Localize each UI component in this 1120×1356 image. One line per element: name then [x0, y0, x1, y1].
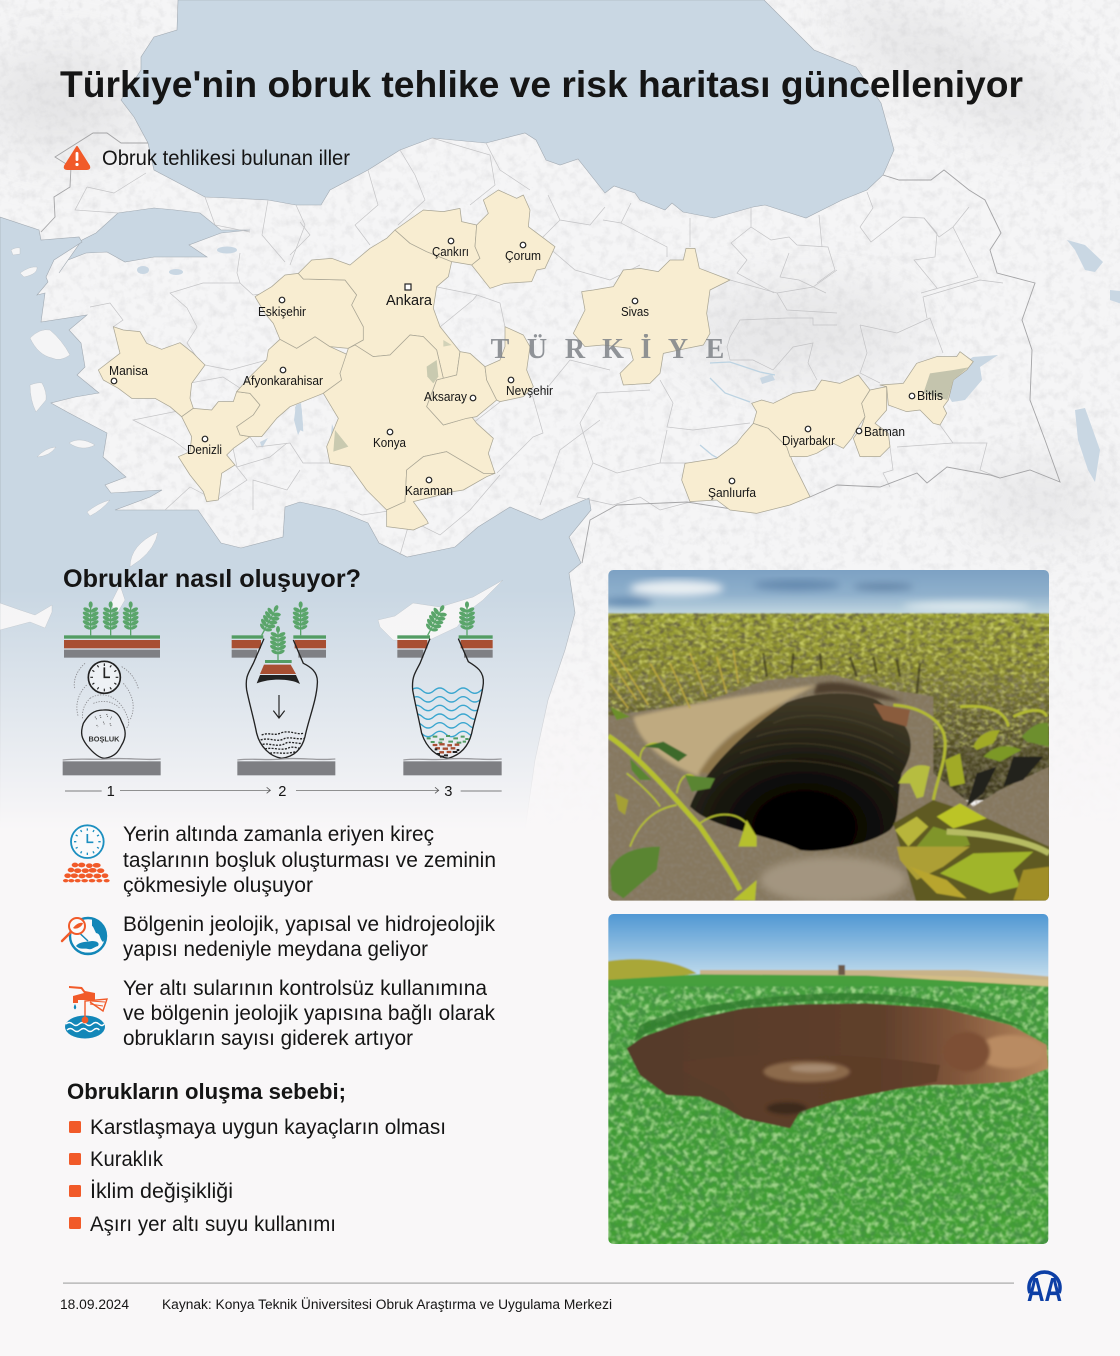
heading: how sinkholes form: Obruklar nasıl oluşuyor?: [63, 565, 361, 593]
text: groundwater use: obrukların sayısı giderek artıyor: [123, 1026, 413, 1050]
step numbers and arrows: 2: [278, 784, 286, 800]
text: groundwater use: ve bölgenin jeolojik yapısına bağlı olarak: [123, 1001, 495, 1025]
city labels: Karaman: [405, 484, 453, 498]
stage 1: BOŞLUK: [89, 735, 120, 744]
icon: clock and limestone: [63, 825, 110, 882]
provinces at risk (eastern): [573, 248, 973, 513]
text: geology: yapısı nedeniyle meydana geliyor: [123, 937, 428, 961]
islands: [0, 248, 503, 643]
city labels: Bitlis: [917, 389, 943, 403]
city labels: Çankırı: [432, 245, 469, 259]
right plants: [893, 705, 1047, 800]
city labels: Afyonkarahisar: [243, 374, 323, 388]
city labels: Şanlıurfa: [708, 486, 756, 500]
city labels: Manisa: [109, 364, 148, 378]
causes heading: Obrukların oluşma sebebi;: [67, 1079, 346, 1104]
national borders: [41, 133, 1060, 563]
icon: warning triangle: [65, 147, 89, 169]
lower page background: [0, 830, 1120, 1356]
provincial borders: [75, 138, 1003, 555]
stage 3: [397, 601, 502, 775]
causes list: Aşırı yer altı suyu kullanımı: [90, 1212, 336, 1236]
city labels: [109, 238, 943, 500]
text: groundwater use: Yer altı sularının kontrolsüz kullanımına: [123, 976, 487, 1000]
causes list: Karstlaşmaya uygun kayaçların olması: [90, 1115, 446, 1139]
text: limestone voids: Yerin altında zamanla eriyen kireç: [123, 822, 434, 846]
logo: Anadolu Agency: AA: [1027, 1271, 1062, 1308]
step numbers and arrows: [65, 784, 502, 800]
text: geology: Bölgenin jeolojik, yapısal ve hidrojeolojik: [123, 912, 495, 936]
step numbers and arrows: 1: [107, 784, 115, 800]
footer source: Kaynak: Konya Teknik Üniversitesi Obruk Araştırma ve Uygulama Merkezi: [162, 1297, 612, 1312]
text: limestone voids: taşlarının boşluk oluşturması ve zeminin: [123, 848, 496, 872]
stage 1: [63, 601, 161, 775]
diagram: three formation stages: [63, 601, 502, 800]
text: geology: [123, 912, 495, 961]
lakes: [137, 240, 1120, 482]
country label: TÜRKİYE: [491, 334, 724, 365]
city labels: Sivas: [621, 305, 649, 319]
footer date: 18.09.2024: [60, 1297, 129, 1312]
city labels: Ankara: [386, 292, 433, 309]
causes list: Kuraklık: [90, 1147, 163, 1171]
crop stems: [610, 643, 738, 708]
city labels: Çorum: [505, 249, 541, 263]
city labels: Denizli: [187, 443, 222, 457]
text: limestone voids: çökmesiyle oluşuyor: [123, 873, 313, 897]
causes list: İklim değişikliği: [90, 1179, 233, 1203]
photo: sinkhole in green field: [605, 911, 1052, 1247]
city labels: Diyarbakır: [782, 434, 835, 448]
icon: water tap and groundwater: [65, 986, 107, 1038]
provinces at risk (western and central): [98, 190, 555, 530]
photo: sinkhole in sunflower field: [600, 567, 1052, 903]
text: groundwater use: [123, 976, 495, 1050]
step numbers and arrows: 3: [444, 784, 452, 800]
text: limestone voids: [123, 822, 496, 897]
footer rule: [63, 1282, 1014, 1284]
bottom fade into page background: [0, 590, 1120, 830]
city labels: Konya: [373, 436, 406, 450]
stage 2: [232, 601, 335, 775]
legend: [65, 147, 350, 170]
explanatory points: [62, 822, 496, 1050]
river lines: [700, 362, 775, 462]
city labels: Eskişehir: [258, 305, 306, 319]
icon: globe and magnifier: [62, 918, 106, 955]
causes list: [69, 1115, 446, 1236]
city labels: Nevşehir: [506, 384, 553, 398]
title: Türkiye'nin obruk tehlike ve risk haritası güncelleniyor: [60, 64, 1023, 105]
left plant: [608, 736, 740, 890]
legend text: Obruk tehlikesi bulunan iller: [102, 147, 350, 170]
city labels: Aksaray: [424, 390, 468, 404]
city labels: Batman: [864, 425, 905, 439]
